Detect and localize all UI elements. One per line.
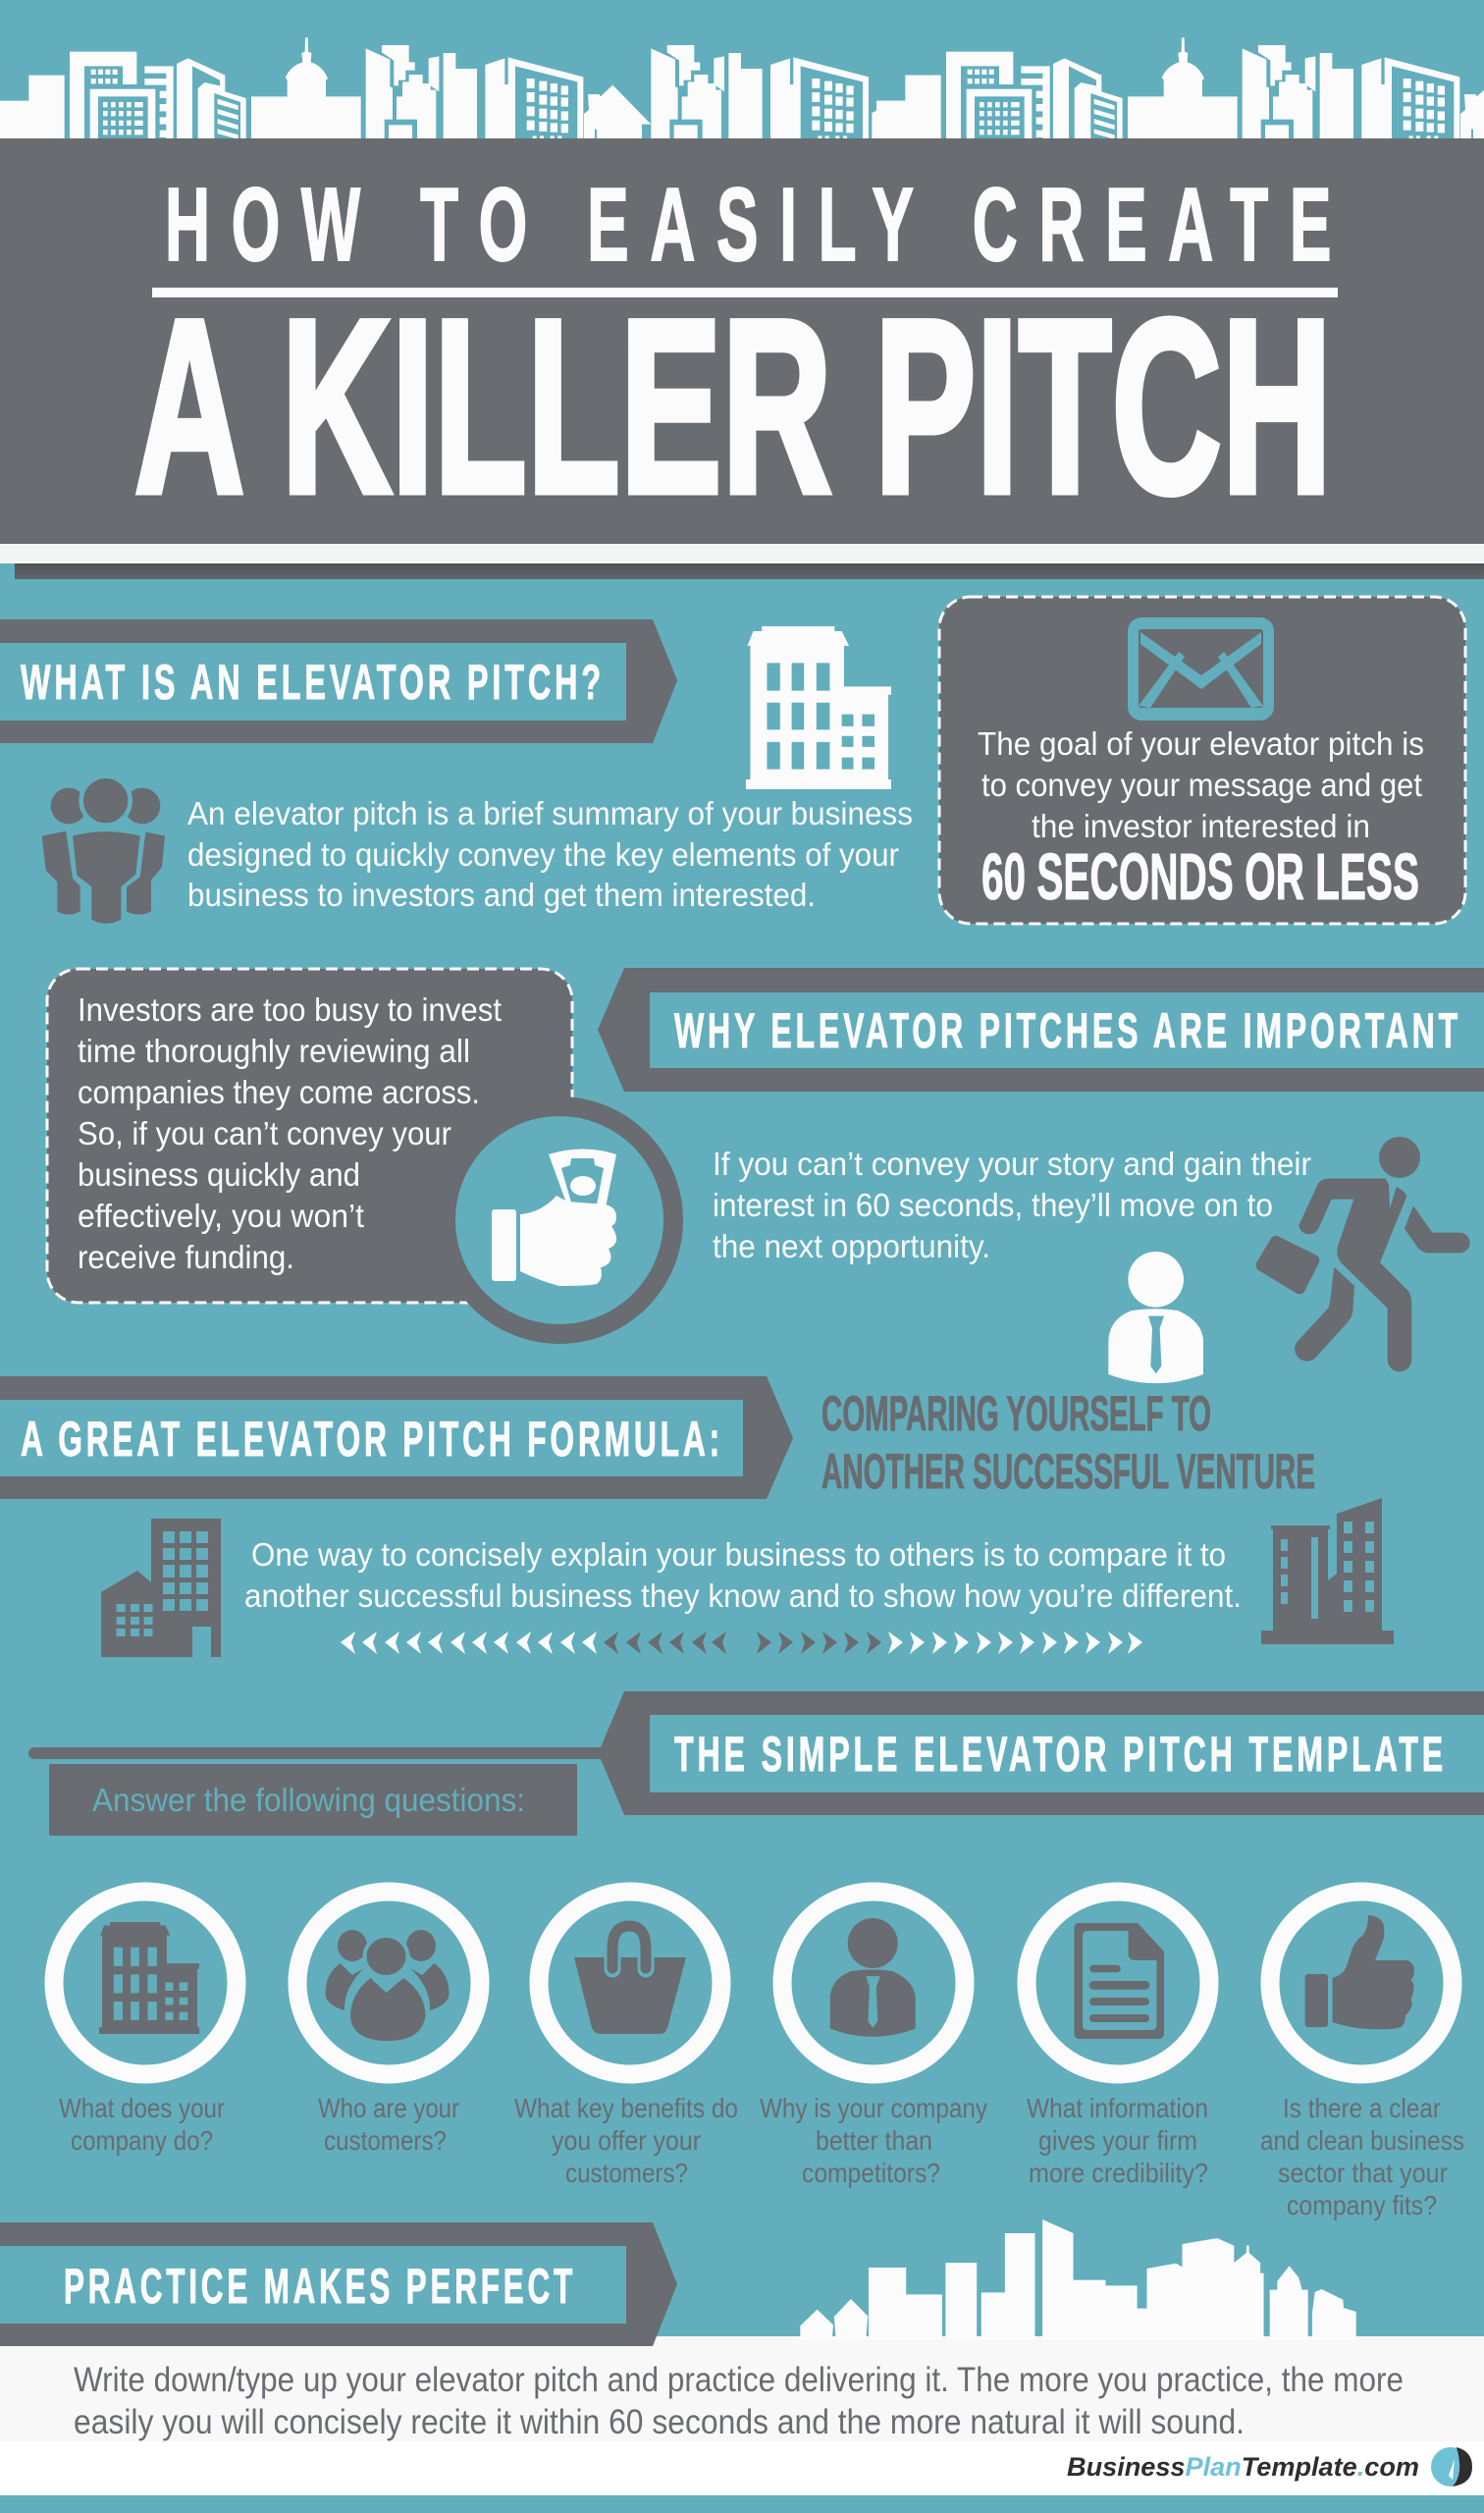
chevrons: pointing left and right	[341, 1631, 1142, 1654]
question 3: benefits: you offer your	[552, 2125, 701, 2156]
panel: investors callout: Investors are too busy to invest	[78, 991, 502, 1028]
text: story in 60 seconds: If you can’t convey your story and gain their	[713, 1146, 1311, 1182]
question 5: credibility: What information	[1027, 2093, 1208, 2123]
text: comparison explanation: another successful business they know and to show how you’re different.	[244, 1577, 1242, 1614]
footer white band	[0, 2336, 1484, 2495]
text: comparison explanation: One way to concisely explain your business to others is to compare it to	[251, 1536, 1226, 1573]
callout text: the investor interested in	[1032, 808, 1370, 844]
text: elevator pitch definition: designed to quickly convey the key elements of your	[187, 836, 899, 873]
question 3: benefits: What key benefits do	[514, 2093, 738, 2123]
panel: goal callout	[939, 597, 1465, 924]
question 4: competitors	[760, 1892, 987, 2188]
icon: white businessman	[1108, 1252, 1203, 1383]
question 6: sector: Is there a clear	[1283, 2093, 1441, 2123]
ribbon: practice makes perfect: PRACTICE MAKES PERFECT	[64, 2259, 576, 2314]
question 6: sector: sector that your	[1278, 2158, 1448, 2188]
title banner	[0, 138, 1484, 579]
question 1: company: What does your	[59, 2093, 225, 2123]
footer skyline	[800, 2219, 1356, 2339]
icon: right gray building	[1261, 1498, 1394, 1644]
ribbon: the simple elevator pitch template	[28, 1691, 1484, 1815]
question 5: credibility	[1027, 1892, 1209, 2188]
logo: businessplantemplate.com: BusinessPlanTemplate.com	[1067, 2452, 1419, 2482]
question 4: competitors: better than	[816, 2125, 932, 2156]
question 3: benefits	[514, 1892, 738, 2188]
question 1: company	[54, 1892, 237, 2156]
question 2: customers	[297, 1892, 480, 2156]
logo: businessplantemplate.com	[1067, 2447, 1472, 2486]
ribbon: practice makes perfect	[0, 2222, 677, 2346]
panel: investors callout: companies they come across.	[78, 1074, 480, 1110]
icon: hand holding money	[446, 1106, 673, 1334]
label: answer the following questions: Answer the following questions:	[92, 1782, 525, 1818]
panel: investors callout: So, if you can’t convey your	[78, 1115, 451, 1151]
heading: comparing yourself: COMPARING YOURSELF TO	[822, 1386, 1211, 1441]
question 3: benefits: customers?	[565, 2158, 688, 2188]
callout text: to convey your message and get	[981, 767, 1422, 803]
icon: envelope	[1128, 617, 1274, 721]
icon: logo mark	[1431, 2447, 1472, 2486]
text: elevator pitch definition	[187, 795, 913, 913]
icon: running businessman	[1262, 1137, 1470, 1371]
header skyline	[0, 37, 1484, 140]
question 2: customers: customers?	[324, 2125, 447, 2156]
ribbon: what is an elevator pitch	[0, 619, 677, 743]
ribbon: a great elevator pitch formula	[0, 1376, 793, 1499]
text: comparison explanation	[244, 1536, 1242, 1614]
label: answer the following questions	[49, 1764, 577, 1836]
icon: white office building	[746, 626, 891, 789]
text: practice advice: easily you will concisely recite it within 60 seconds and the more natural it will sound.	[74, 2403, 1245, 2441]
callout text: The goal of your elevator pitch is	[978, 725, 1424, 762]
panel: investors callout: time thoroughly reviewing all	[78, 1033, 470, 1069]
question 1: company: company do?	[71, 2125, 213, 2156]
text: story in 60 seconds: interest in 60 seconds, they’ll move on to	[713, 1187, 1273, 1223]
text: elevator pitch definition: An elevator pitch is a brief summary of your business	[187, 795, 913, 831]
panel: investors callout: receive funding.	[78, 1239, 294, 1275]
question 2: customers: Who are your	[318, 2093, 459, 2123]
question 5: credibility: more credibility?	[1029, 2158, 1208, 2188]
question 4: competitors: Why is your company	[760, 2093, 987, 2123]
panel: investors callout: business quickly and	[78, 1156, 360, 1193]
text: practice advice	[74, 2361, 1404, 2441]
icon: group of people	[42, 776, 165, 924]
title rule	[152, 288, 1338, 297]
callout text	[978, 725, 1424, 844]
text: elevator pitch definition: business to investors and get them interested.	[187, 877, 816, 913]
question 6: sector	[1260, 1892, 1464, 2220]
ribbon: what is an elevator pitch: WHAT IS AN ELEVATOR PITCH?	[21, 655, 605, 710]
panel: investors callout	[47, 969, 572, 1303]
heading: comparing yourself	[822, 1386, 1315, 1499]
question 6: sector: company fits?	[1287, 2190, 1437, 2220]
text: story in 60 seconds	[713, 1146, 1311, 1264]
icon: left gray building	[101, 1519, 221, 1657]
ribbon: why elevator pitches are important	[598, 968, 1484, 1092]
ribbon: a great elevator pitch formula: A GREAT ELEVATOR PITCH FORMULA:	[21, 1412, 723, 1467]
panel: investors callout: effectively, you won’t	[78, 1198, 364, 1234]
question 4: competitors: competitors?	[802, 2158, 940, 2188]
text: story in 60 seconds: the next opportunity.	[713, 1228, 990, 1264]
question 5: credibility: gives your firm	[1038, 2125, 1197, 2156]
